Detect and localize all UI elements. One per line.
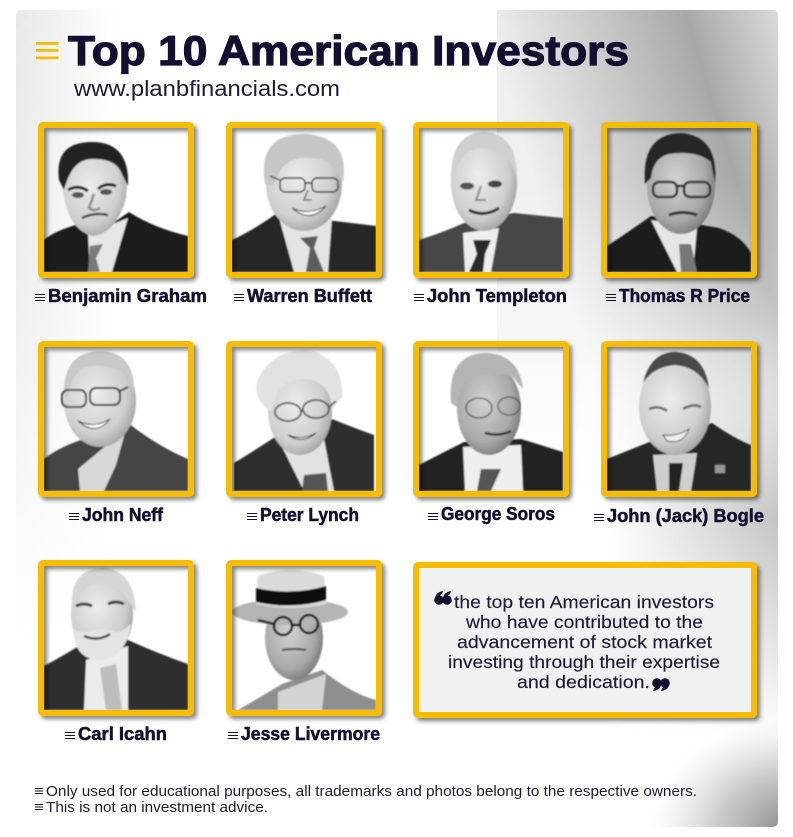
- investor card: Warren Buffett: [229, 125, 379, 306]
- icon: closing quote mark: [652, 678, 670, 691]
- quote box: [416, 565, 754, 715]
- frame: [416, 125, 566, 275]
- name label: John Neff: [82, 505, 164, 525]
- portrait: John Neff: [44, 351, 188, 491]
- portrait: Benjamin Graham: [44, 142, 188, 272]
- investor card: Jesse Livermore: [228, 563, 380, 744]
- portrait: George Soros: [419, 353, 563, 491]
- name label: Jesse Livermore: [241, 724, 380, 744]
- portrait: John (Jack) Bogle: [607, 352, 751, 491]
- website: www.planbfinancials.com: [73, 76, 340, 101]
- frame: [229, 125, 379, 275]
- disclaimer line 2: This is not an investment advice.: [46, 800, 268, 816]
- name label: John Templeton: [427, 286, 567, 306]
- frame: [604, 125, 754, 275]
- quote panel: [416, 565, 754, 715]
- name label: Thomas R Price: [619, 286, 750, 306]
- investor card: John Templeton: [414, 125, 567, 306]
- frame: [229, 344, 379, 494]
- quote text: the top ten American investors: [454, 592, 714, 612]
- quote text: investing through their expertise: [448, 652, 720, 672]
- quote text: and dedication.: [517, 672, 650, 692]
- investor card: Peter Lynch: [229, 344, 379, 525]
- frame: [41, 563, 191, 713]
- quote text: who have contributed to the: [465, 612, 703, 632]
- portrait: Carl Icahn: [44, 568, 188, 710]
- portrait: John Templeton: [419, 132, 563, 272]
- portrait: Warren Buffett: [232, 134, 376, 272]
- frame: [229, 563, 379, 713]
- name label: Peter Lynch: [260, 505, 359, 525]
- frame: [416, 344, 566, 494]
- name label: Warren Buffett: [247, 286, 372, 306]
- frame: [41, 125, 191, 275]
- investor card: Benjamin Graham: [35, 125, 207, 306]
- name label: Carl Icahn: [78, 724, 167, 744]
- investor card: Thomas R Price: [604, 125, 754, 306]
- icon: opening quote mark: [434, 591, 452, 605]
- portrait: Peter Lynch: [234, 350, 374, 491]
- quote text: [448, 592, 720, 692]
- frame: [41, 344, 191, 494]
- investor card: Carl Icahn: [41, 563, 191, 744]
- disclaimer line 1: Only used for educational purposes, all trademarks and photos belong to the respective owners.: [46, 784, 697, 800]
- frame: [604, 344, 754, 494]
- name label: John (Jack) Bogle: [607, 506, 764, 526]
- name label: George Soros: [441, 504, 555, 524]
- portrait: Thomas R Price: [607, 133, 751, 272]
- portrait: Jesse Livermore: [232, 570, 376, 710]
- disclaimer footer: [35, 784, 697, 816]
- investor card: George Soros: [416, 344, 566, 524]
- icon: yellow menu bars: [36, 42, 58, 59]
- title: Top 10 American Investors: [68, 27, 629, 74]
- title block: [36, 27, 629, 101]
- name label: Benjamin Graham: [48, 286, 207, 306]
- quote text: advancement of stock market: [457, 632, 712, 652]
- investor card: John (Jack) Bogle: [594, 344, 764, 526]
- investor card: John Neff: [41, 344, 191, 525]
